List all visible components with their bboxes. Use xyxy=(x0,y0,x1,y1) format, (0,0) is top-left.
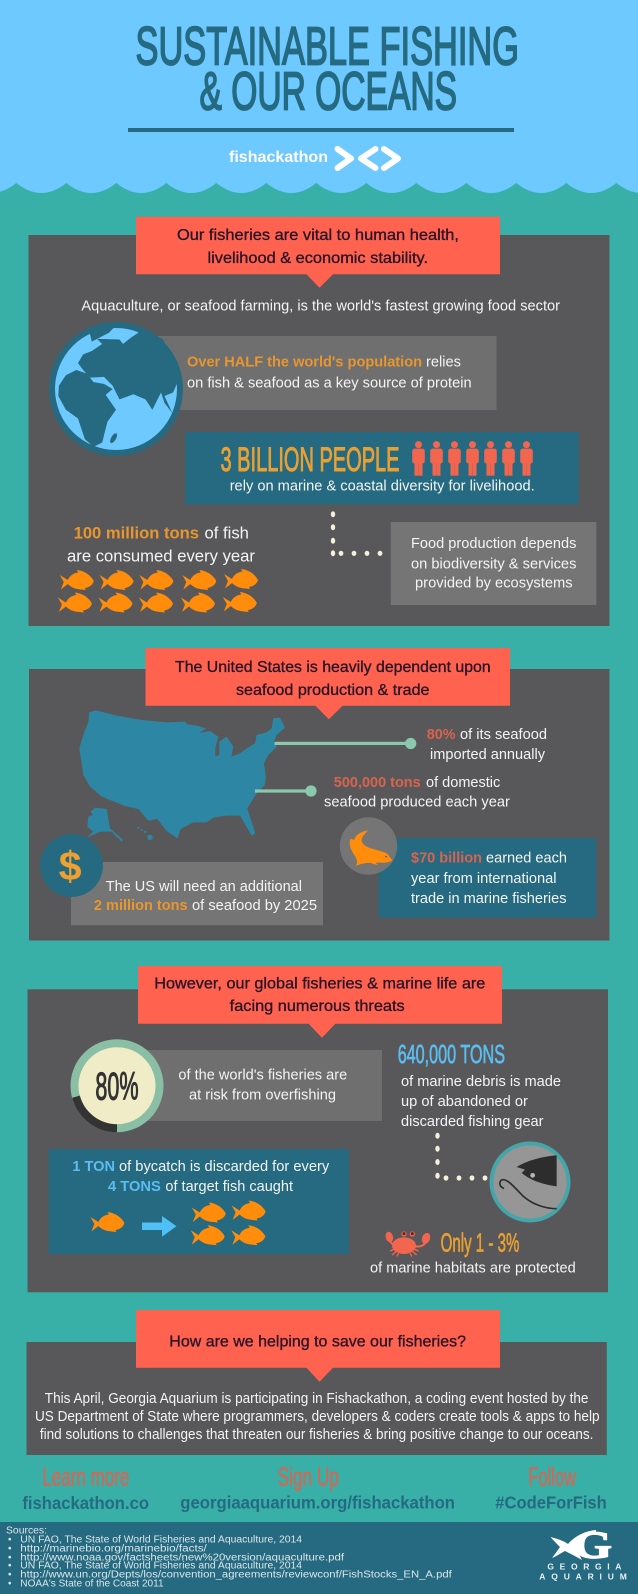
banner: vital fisheries: livelihood & economic stability. xyxy=(208,250,428,267)
panel: united states xyxy=(29,648,610,940)
aquaculture statement: Aquaculture, or seafood farming, is the world's fastest growing food sector xyxy=(81,298,560,315)
stat: 100 million tons: are consumed every year xyxy=(67,548,255,566)
title rule xyxy=(128,128,514,132)
callout: half the population: Over HALF the world's population xyxy=(187,354,422,371)
call to action: follow xyxy=(495,1462,607,1512)
sources: • xyxy=(8,1534,12,1545)
panel: threats xyxy=(28,966,608,1292)
sources: • xyxy=(8,1560,12,1571)
panel: how are we helping xyxy=(26,1310,607,1455)
callout: food production: Food production depends xyxy=(411,535,576,552)
sources: UN FAO, The State of World Fisheries and Aquaculture, 2014 xyxy=(20,1560,302,1571)
icon: four fish xyxy=(191,1200,266,1245)
callout: 3 billion people: rely on marine & coastal diversity for livelihood. xyxy=(230,478,535,495)
stat: 640,000 tons: discarded fishing gear xyxy=(401,1113,544,1130)
callout: bycatch: 4 TONS xyxy=(108,1178,161,1195)
callout: half the population: relies xyxy=(426,354,461,371)
stat: only 1-3 percent: Only 1 - 3% xyxy=(441,1228,519,1258)
sources: • xyxy=(8,1552,12,1563)
sources: NOAA's State of the Coast 2011 xyxy=(20,1578,164,1589)
banner: threats xyxy=(138,966,502,1038)
callout: 70 billion: $70 billion xyxy=(411,850,482,867)
logo: Georgia Aquarium: G xyxy=(573,1524,612,1567)
stat: only 1-3 percent: of marine habitats are protected xyxy=(370,1260,576,1277)
banner: helping: How are we helping to save our fisheries? xyxy=(169,1334,466,1351)
sky header with waves xyxy=(0,0,638,193)
sources: http://marinebio.org/marinebio/facts/ xyxy=(20,1543,207,1554)
icon: single fish xyxy=(90,1212,124,1232)
sources: UN FAO, The State of World Fisheries and Aquaculture, 2014 xyxy=(20,1534,302,1545)
banner: united states: The United States is heavily dependent upon xyxy=(175,659,491,676)
callout: 70 billion: year from international xyxy=(411,870,556,887)
callout: food production: provided by ecosystems xyxy=(415,574,573,591)
connector: 80 percent xyxy=(274,738,416,749)
callout: bycatch: of bycatch is discarded for every xyxy=(119,1158,330,1175)
banner: united states: seafood production & trade xyxy=(236,682,430,699)
banner: vital fisheries: Our fisheries are vital to human health, xyxy=(177,227,459,244)
stat: 100 million tons xyxy=(67,524,255,566)
sources: • xyxy=(8,1543,12,1554)
icon: globe xyxy=(49,322,183,456)
call to action: follow: Follow xyxy=(528,1462,576,1492)
callout: 2 million tons: of seafood by 2025 xyxy=(192,897,317,914)
paragraph: find solutions to challenges that threaten our fisheries & bring positive change to our oceans. xyxy=(40,1426,593,1443)
icon: crab xyxy=(384,1231,432,1256)
fishackathon logo xyxy=(229,149,398,168)
sources: http://www.noaa.gov/factsheets/new%20version/aquaculture.pdf xyxy=(20,1552,344,1563)
banner: united states xyxy=(146,648,510,719)
call to action: sign up xyxy=(180,1462,455,1512)
stat: 640,000 tons: of marine debris is made xyxy=(401,1073,561,1090)
stat: 500,000 tons: 500,000 tons xyxy=(334,774,421,791)
callout: 80 percent at risk: at risk from overfishing xyxy=(189,1086,336,1103)
call to action: learn more xyxy=(22,1462,149,1513)
callout: 80 percent at risk: of the world's fisheries are xyxy=(178,1066,347,1083)
chart: 80 percent ring xyxy=(74,1043,160,1128)
stat: 100 million tons: 100 million tons xyxy=(74,524,199,542)
icon: arrow xyxy=(142,1216,176,1237)
banner: threats: facing numerous threats xyxy=(230,998,405,1015)
callout: half the population xyxy=(150,336,496,410)
callout: bycatch xyxy=(49,1149,349,1254)
stat: 500,000 tons xyxy=(324,774,510,811)
callout: 70 billion: earned each xyxy=(486,850,567,867)
title: & OUR OCEANS xyxy=(200,62,457,122)
icon: fish rows xyxy=(58,569,258,612)
callout: 2 million tons: The US will need an additional xyxy=(106,878,302,895)
banner: threats: However, our global fisheries & marine life are xyxy=(154,975,485,992)
logo: Georgia Aquarium: GEORGIA xyxy=(547,1561,621,1571)
callout: 3 billion people xyxy=(185,432,579,504)
paragraph: This April, Georgia Aquarium is participating in Fishackathon, a coding event hosted by the xyxy=(45,1390,589,1407)
stat: only 1-3 percent xyxy=(370,1228,576,1277)
map: USA xyxy=(79,710,285,842)
stat: 80 percent imported: 80% xyxy=(427,726,456,743)
callout: bycatch: of target fish caught xyxy=(165,1178,294,1195)
stat: 500,000 tons: of domestic xyxy=(426,774,501,791)
sources: http://www.un.org/Depts/los/convention_agreements/reviewconf/FishStocks_EN_A.pdf xyxy=(20,1569,452,1580)
sources: Sources: xyxy=(6,1525,47,1536)
callout: half the population: on fish & seafood as a key source of protein xyxy=(187,374,472,391)
icon: orange fish in circle xyxy=(340,817,397,875)
stat: 640,000 tons: 640,000 TONS xyxy=(398,1039,505,1069)
icon: fish and hook xyxy=(492,1144,568,1220)
logo: Georgia Aquarium xyxy=(539,1524,627,1581)
title xyxy=(136,16,519,122)
sources: • xyxy=(8,1569,12,1580)
callout: food production xyxy=(391,522,596,605)
dotted connector xyxy=(435,1133,487,1181)
sources: • xyxy=(8,1578,12,1589)
fishackathon logo: fishackathon xyxy=(229,149,328,166)
callout: 70 billion: trade in marine fisheries xyxy=(411,890,566,907)
connector: 500,000 tons xyxy=(255,785,317,797)
footer bar xyxy=(0,1522,638,1594)
callout: 2 million tons: 2 million tons xyxy=(94,897,188,914)
stat: 640,000 tons xyxy=(398,1039,561,1130)
call to action: sign up: Sign Up xyxy=(278,1462,339,1492)
call to action: learn more: fishackathon.co xyxy=(22,1493,149,1513)
stat: 640,000 tons: up of abandoned or xyxy=(401,1093,528,1110)
stat: 80 percent imported: of its seafood xyxy=(460,726,547,743)
stat: 100 million tons: of fish xyxy=(204,524,249,542)
banner: vital fisheries xyxy=(136,217,500,288)
icon: dollar xyxy=(40,834,103,897)
stat: 80 percent imported: imported annually xyxy=(430,746,545,763)
stat: 80 percent imported xyxy=(427,726,547,763)
callout: bycatch: 1 TON xyxy=(72,1158,115,1175)
icon: dollar: $ xyxy=(59,843,82,889)
call to action: learn more: Learn more xyxy=(42,1462,129,1492)
icon: row of people xyxy=(412,441,533,476)
callout: 70 billion xyxy=(379,838,596,918)
chart: 80 percent ring: 80% xyxy=(95,1066,139,1108)
callout: 80 percent at risk xyxy=(130,1050,382,1121)
stat: 500,000 tons: seafood produced each year xyxy=(324,794,510,811)
sources xyxy=(6,1525,452,1589)
call to action: sign up: georgiaaquarium.org/fishackathon xyxy=(180,1492,455,1512)
callout: food production: on biodiversity & services xyxy=(411,555,576,572)
banner: helping xyxy=(136,1310,500,1382)
callout: 2 million tons xyxy=(71,862,323,925)
paragraph xyxy=(35,1390,600,1443)
dotted connector xyxy=(331,511,382,556)
callout: 3 billion people: 3 BILLION PEOPLE xyxy=(220,441,400,479)
logo: Georgia Aquarium: AQUARIUM xyxy=(539,1571,627,1581)
panel: vital fisheries xyxy=(28,217,610,626)
call to action: follow: #CodeForFish xyxy=(495,1492,607,1512)
